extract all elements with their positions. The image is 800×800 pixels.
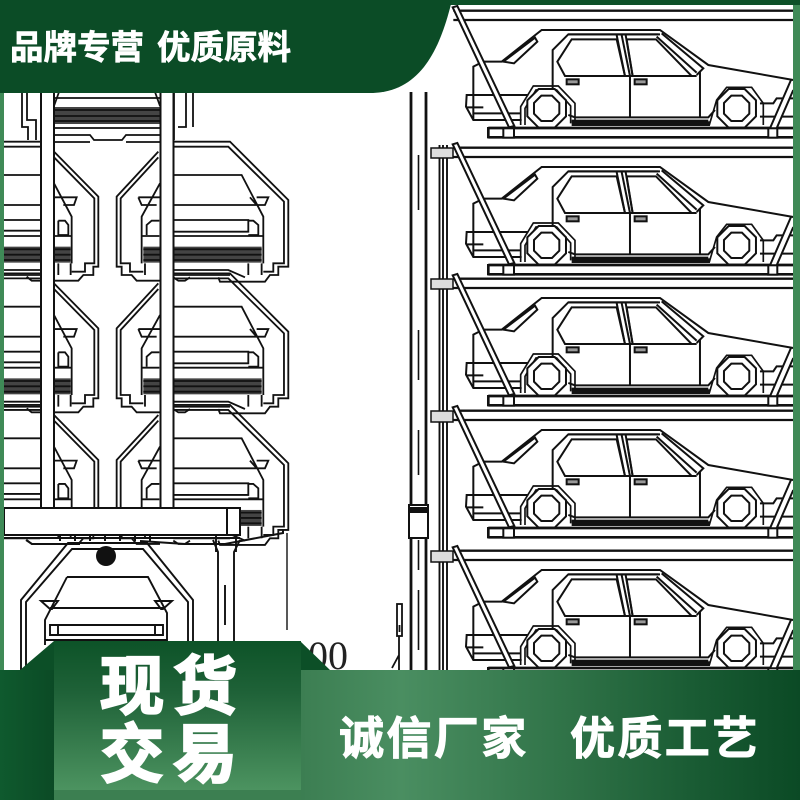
small leader mark (392, 604, 402, 670)
bottom car in lower pit (21, 543, 193, 670)
header text: 优质原料 (157, 30, 291, 67)
dimension line (286, 533, 288, 630)
black pivot dot (96, 546, 116, 566)
footer right gradient band (301, 670, 800, 800)
slogan text (339, 713, 760, 764)
car level 5 (453, 546, 793, 678)
rail bolts (431, 148, 453, 562)
footer left dark block (0, 670, 55, 800)
car level 1 (453, 6, 793, 138)
main badge panel (54, 641, 301, 790)
car level 3 (453, 274, 793, 406)
panel roof left fold (20, 641, 54, 670)
car level 4 (453, 406, 793, 538)
frame: right edge strip (793, 0, 800, 672)
badge text: 现货交易 (100, 651, 246, 791)
badge text: 现货交易: 交易 (100, 719, 246, 791)
parking cell row 2 (3, 273, 288, 413)
lower horizontal beam (4, 508, 283, 544)
main vertical column (411, 92, 426, 670)
header banner (0, 0, 452, 93)
car level 2 (453, 143, 793, 275)
column pair (41, 92, 174, 508)
header text (10, 30, 291, 67)
parking cell row 1 (3, 142, 288, 282)
slogan text: 优质工艺 (570, 713, 760, 764)
short support post (213, 535, 240, 670)
parking cell row 3 (3, 405, 288, 545)
header text: 品牌专营 (10, 30, 144, 67)
column collar (409, 505, 428, 538)
under panel strip (54, 790, 301, 800)
frame: left edge strip (0, 0, 4, 672)
panel roof right fold (300, 641, 330, 670)
badge text: 现货交易: 现货 (100, 651, 246, 723)
upper cell remnant (22, 92, 193, 142)
slogan text: 诚信厂家 (339, 713, 529, 764)
dimension number: 00 (308, 633, 348, 678)
footer bar (0, 641, 800, 800)
second vertical rail (440, 145, 447, 670)
frame: top edge strip (0, 0, 800, 5)
